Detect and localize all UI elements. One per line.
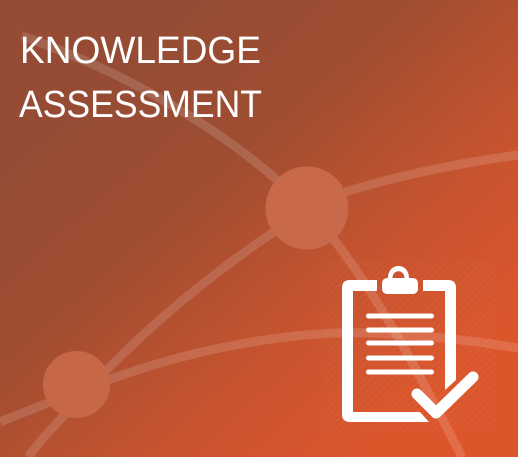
title: KNOWLEDGE — [20, 30, 261, 72]
node: small circle — [43, 351, 110, 418]
clipboard clip — [382, 266, 418, 294]
line: small node arc to right edge — [108, 333, 518, 380]
node: large circle — [266, 166, 348, 250]
title — [19, 30, 262, 126]
checkmark — [417, 377, 473, 413]
clipboard outline — [342, 280, 456, 422]
line: large node through small node to bottom left — [28, 231, 275, 457]
text lines — [368, 316, 432, 372]
line: top left through large node to bottom right — [22, 36, 462, 457]
title: ASSESSMENT — [19, 84, 262, 126]
icon: clipboard with checkmark — [342, 266, 473, 422]
line: small node to left edge — [0, 402, 50, 422]
line: large node to right edge — [345, 155, 518, 192]
icon backing hatch — [322, 259, 495, 431]
